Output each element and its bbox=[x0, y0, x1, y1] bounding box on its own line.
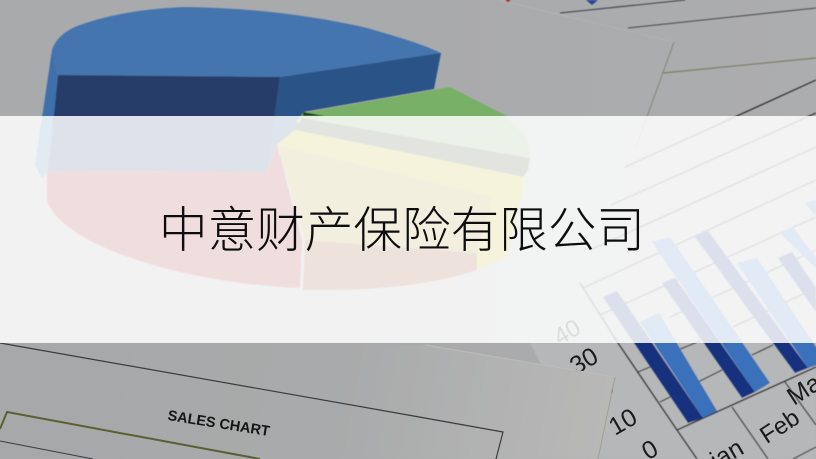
axis labels bbox=[549, 314, 816, 459]
axis labels: 40 bbox=[549, 314, 586, 351]
axis labels: 30 bbox=[565, 342, 603, 380]
bars bbox=[603, 291, 703, 423]
translucent white band bbox=[0, 116, 816, 343]
bar chart at right bbox=[530, 80, 816, 459]
pie slice: green bbox=[295, 87, 530, 177]
axis labels: 20 bbox=[581, 372, 619, 410]
bottom sales chart sheet bbox=[0, 343, 615, 459]
pie slice: yellow bbox=[277, 130, 523, 270]
pie slice: beige bbox=[277, 145, 493, 253]
pie slice: blue bbox=[35, 7, 441, 178]
axis labels: 10 bbox=[604, 403, 642, 441]
chart paper bbox=[530, 343, 816, 459]
axis labels: Feb bbox=[755, 404, 805, 449]
axis lines bbox=[580, 283, 697, 459]
pie side: beige front bbox=[303, 240, 477, 290]
3D pie chart bbox=[35, 7, 530, 290]
pie slice: pink bbox=[47, 145, 302, 288]
grid lines bbox=[580, 80, 816, 459]
top right paper sheets bbox=[498, 0, 816, 150]
title: 中意财产保险有限公司 bbox=[159, 204, 645, 258]
sales chart label: SALES CHART bbox=[166, 408, 271, 440]
